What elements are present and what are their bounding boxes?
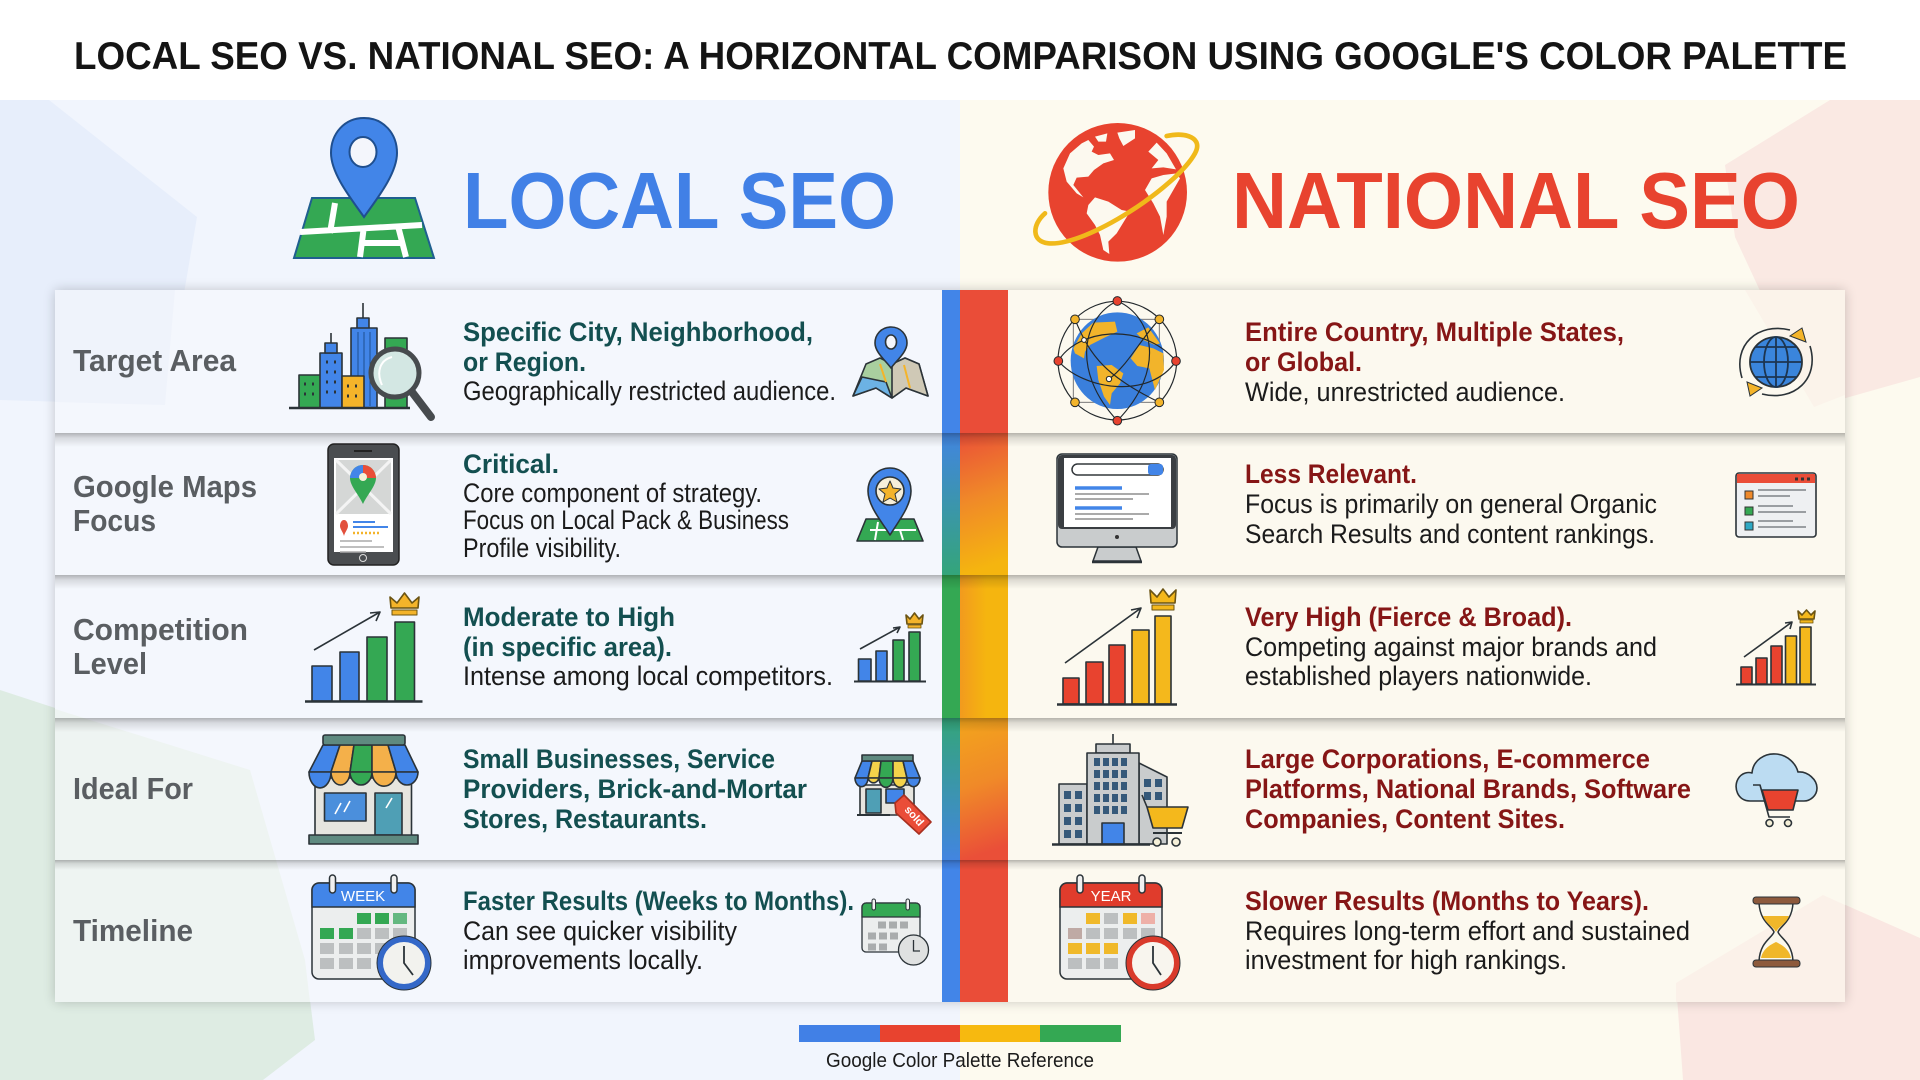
row: Google Maps Focus (local) [73, 444, 923, 565]
icon: office building with cart [1052, 734, 1188, 846]
text: Specific City: Geographically restricted audience. [463, 376, 836, 406]
text: Less Relevant: Focus is primarily on general Organic [1245, 489, 1657, 519]
text: Specific City [463, 317, 836, 406]
text: Critical: Focus on Local Pack & Business [463, 505, 789, 535]
heading: NATIONAL SEO: NATIONAL SEO [1232, 156, 1800, 245]
row: Timeline (local) [73, 875, 928, 990]
center strip: blue and green [942, 290, 960, 1002]
icon: week calendar with clock: WEEK [341, 888, 385, 905]
icon: small red and yellow bars [1736, 610, 1816, 684]
text: Very High: Very High (Fierce & Broad). [1245, 602, 1572, 632]
icon: week calendar with clock [312, 875, 431, 990]
icon: networked globe [1054, 297, 1180, 425]
label: Competition Level [73, 612, 248, 681]
text: Faster Results [463, 886, 854, 975]
text: Small Businesses: Small Businesses, Service [463, 744, 775, 774]
icon: store front [309, 735, 418, 844]
text: Specific City: or Region. [463, 347, 586, 377]
text: Less Relevant: Search Results and content rankings. [1245, 519, 1655, 549]
row: Competition Level (national) [1057, 589, 1816, 704]
icon: local SEO map pin [294, 118, 434, 258]
icon: year calendar with clock: YEAR [1091, 888, 1132, 905]
text: Very High: Competing against major brands and [1245, 632, 1657, 662]
icon: small calendar with clock [862, 899, 928, 965]
icon: rising bars with crown [305, 593, 422, 702]
row: Ideal For (national) [1052, 734, 1817, 846]
text: Small Businesses: Providers, Brick-and-Mortar [463, 774, 807, 804]
label: Target Area: Target Area [73, 343, 237, 378]
panel: local rows background [55, 290, 942, 1002]
text: Very High: established players nationwide. [1245, 661, 1592, 691]
label: Google Maps Focus [73, 469, 257, 538]
icon: monitor with search results [1057, 454, 1177, 562]
text: Slower Results: investment for high rankings. [1245, 945, 1567, 975]
text: Large Corporations [1245, 744, 1691, 834]
icon: small rising bars [854, 613, 926, 682]
text: Moderate to High [463, 602, 833, 691]
text: Faster Results: Can see quicker visibility [463, 916, 738, 946]
icon: cloud with shopping cart [1736, 754, 1817, 826]
text: Entire Country: Entire Country, Multiple States, [1245, 317, 1624, 347]
row: Competition Level (local) [73, 593, 926, 702]
row shadows [55, 433, 1845, 870]
center strip: red and yellow [960, 290, 1008, 1002]
text: Moderate to High: (in specific area). [463, 632, 672, 662]
text: Small Businesses: Stores, Restaurants. [463, 804, 707, 834]
title band: LOCAL SEO VS. NATIONAL SEO: A HORIZONTAL COMPARISON USING GOOGLE'S COLOR PALETTE [74, 35, 1847, 78]
text: Less Relevant [1245, 459, 1657, 549]
icon: pin on folded map [853, 327, 928, 398]
text: Entire Country [1245, 317, 1624, 407]
heading: LOCAL SEO: LOCAL SEO [463, 156, 896, 245]
text: Critical: Critical. [463, 449, 559, 479]
label: Ideal For: Ideal For [73, 771, 193, 806]
icon: star pin on map [857, 468, 923, 541]
text: Faster Results: improvements locally. [463, 945, 703, 975]
text: Entire Country: or Global. [1245, 347, 1362, 377]
text: Critical [463, 449, 789, 563]
text: Small Businesses [463, 744, 807, 834]
text: Very High [1245, 602, 1657, 691]
text: Critical: Core component of strategy. [463, 478, 762, 508]
icon: small store with sold tag [855, 755, 931, 834]
text: Entire Country: Wide, unrestricted audience. [1245, 377, 1565, 407]
icon: results window [1736, 473, 1816, 537]
legend caption: Google Color Palette Reference [826, 1050, 1094, 1072]
legend: Google palette bar [799, 1025, 1121, 1042]
text: Large Corporations: Large Corporations, E-commerce [1245, 744, 1650, 774]
text: Moderate to High: Intense among local competitors. [463, 661, 833, 691]
label: Google Maps Focus: Focus [73, 503, 156, 538]
table shadow [55, 290, 1845, 1002]
row: Google Maps Focus (national) [1057, 454, 1816, 562]
icon: small store with sold tag: sold [902, 804, 926, 829]
row: Target Area (national) [1054, 297, 1812, 425]
label: Google Maps Focus: Google Maps [73, 469, 257, 504]
icon: city with magnifier [289, 303, 431, 417]
text: Large Corporations: Companies, Content Sites. [1245, 804, 1565, 834]
text: Slower Results: Slower Results (Months to Years). [1245, 886, 1649, 916]
icon: year calendar with clock [1060, 875, 1180, 990]
text: Large Corporations: Platforms, National Brands, Software [1245, 774, 1691, 804]
label: Competition Level: Level [73, 646, 147, 681]
icon: hourglass [1753, 897, 1800, 967]
text: Faster Results: Faster Results (Weeks to Months). [463, 886, 854, 916]
text: Critical: Profile visibility. [463, 533, 621, 563]
row: Ideal For (local) [73, 735, 931, 844]
text: Slower Results: Requires long-term effort and sustained [1245, 916, 1690, 946]
row: Timeline (national) [1060, 875, 1800, 990]
text: Moderate to High: Moderate to High [463, 602, 675, 632]
icon: national SEO globe with ring [1035, 123, 1197, 262]
text: Specific City: Specific City, Neighborhood, [463, 317, 813, 347]
text: Slower Results [1245, 886, 1690, 975]
title band [0, 0, 1920, 100]
label: Timeline: Timeline [73, 913, 193, 948]
icon: phone with map [328, 444, 399, 565]
icon: rising red and yellow bars with crown [1057, 589, 1177, 704]
text: Less Relevant: Less Relevant. [1245, 459, 1417, 489]
row: Target Area (local) [73, 303, 928, 417]
icon: rotating globe [1740, 328, 1812, 396]
label: Competition Level: Competition [73, 612, 248, 647]
panel: national rows background [1008, 290, 1845, 1002]
